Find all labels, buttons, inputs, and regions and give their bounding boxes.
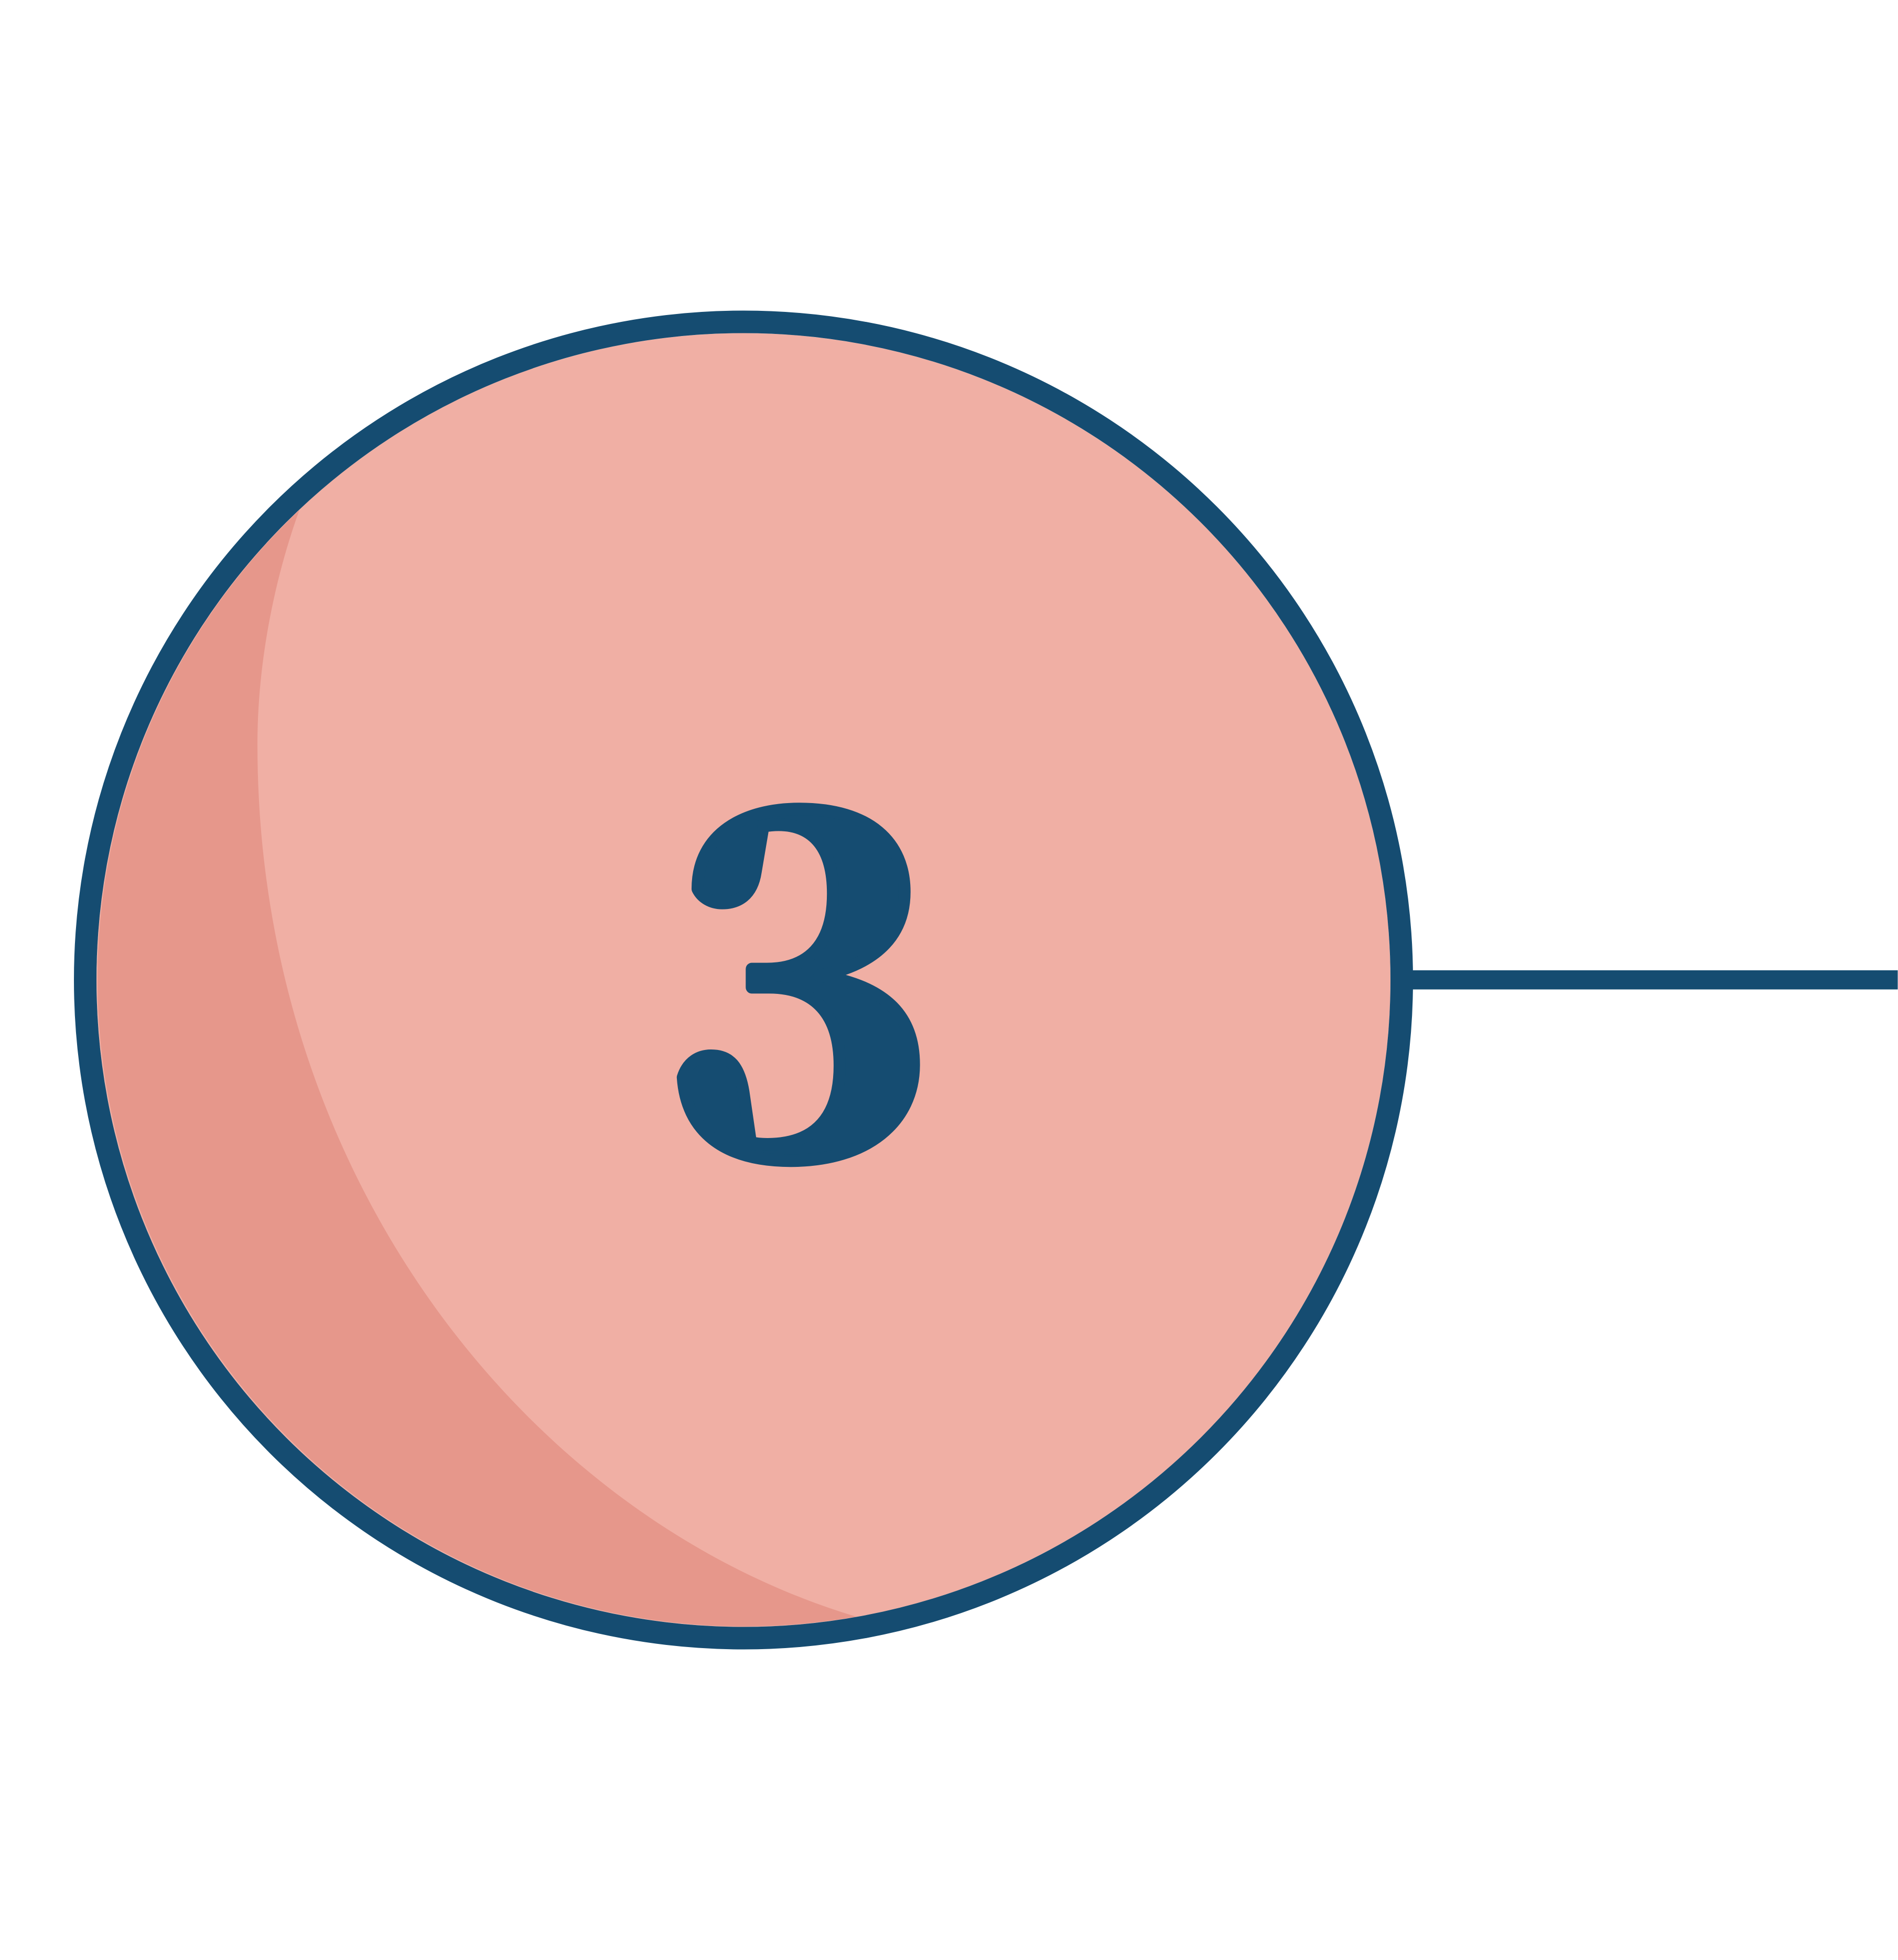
badge outline	[85, 322, 1402, 1638]
number badge	[85, 322, 1402, 1638]
crescent shadow	[98, 510, 856, 1627]
number 3: 3	[661, 614, 934, 1287]
connector line	[1400, 970, 1898, 990]
badge disc	[96, 333, 1390, 1627]
